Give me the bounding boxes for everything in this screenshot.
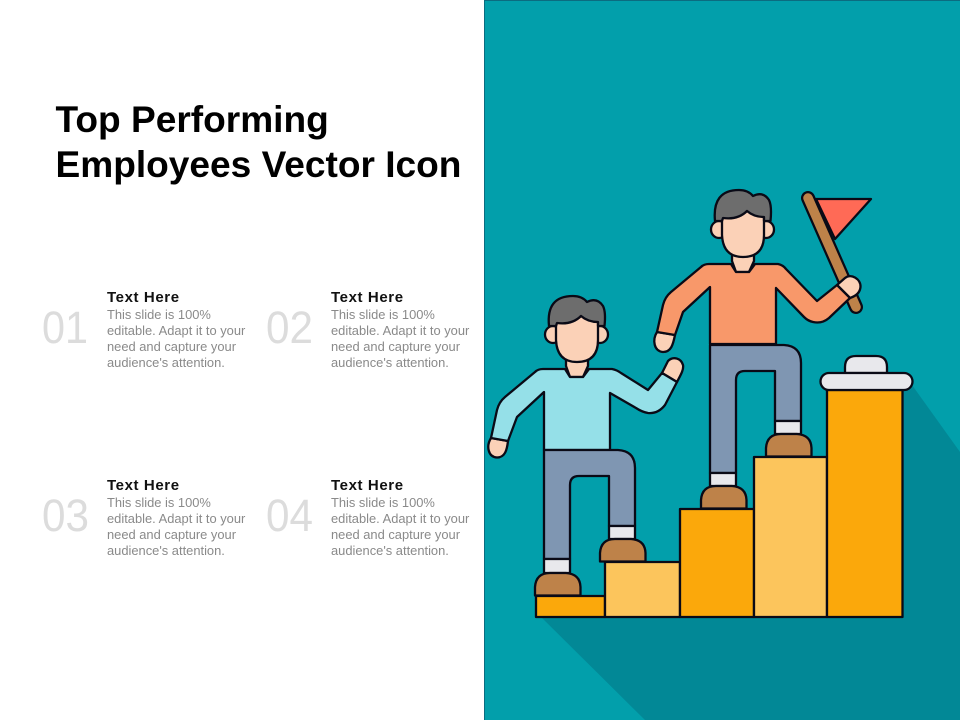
left employee hands	[488, 358, 683, 458]
text block 04: 04	[266, 490, 313, 541]
text block 02: This slide is 100%	[331, 307, 435, 322]
person: right employee with flag	[654, 190, 871, 508]
text block 02: editable. Adapt it to your	[331, 323, 470, 338]
text block 03	[42, 477, 246, 558]
left employee sweater	[491, 369, 677, 450]
text block 04: audience's attention.	[331, 543, 449, 558]
text block 02: audience's attention.	[331, 355, 449, 370]
text block 01: audience's attention.	[107, 355, 225, 370]
left employee socks	[544, 526, 635, 573]
text block 01: Text Here	[107, 289, 180, 306]
text block 03: editable. Adapt it to your	[107, 511, 246, 526]
text block 03: audience's attention.	[107, 543, 225, 558]
text block 01: editable. Adapt it to your	[107, 323, 246, 338]
right employee head	[711, 190, 774, 257]
text block 02: Text Here	[331, 289, 404, 306]
text block 01: 01	[42, 302, 88, 353]
title: Employees Vector Icon	[56, 143, 461, 185]
text block 01	[42, 289, 246, 370]
left employee shoes	[535, 539, 646, 596]
red flag	[816, 199, 871, 239]
flag pole	[808, 198, 856, 307]
long shadow	[536, 385, 960, 720]
right employee neck	[732, 255, 754, 272]
text block 02: 02	[266, 302, 313, 353]
text block 04: need and capture your	[331, 527, 461, 542]
left employee trousers	[544, 450, 635, 559]
text block 04: This slide is 100%	[331, 495, 435, 510]
right employee trousers	[710, 345, 801, 473]
text block 04: editable. Adapt it to your	[331, 511, 470, 526]
text block 03: 03	[42, 490, 89, 541]
panel: teal background	[484, 0, 960, 720]
right employee socks	[710, 421, 801, 486]
text block 04	[266, 477, 470, 558]
right employee hands	[654, 276, 861, 352]
person: left employee	[488, 296, 683, 596]
text block 04: Text Here	[331, 477, 404, 494]
icon: trophy cap on the top bar	[820, 356, 912, 390]
right employee shoes	[701, 434, 812, 508]
text block 02	[266, 289, 470, 370]
text block 03: Text Here	[107, 477, 180, 494]
bar chart: rising steps	[536, 390, 902, 617]
right employee sweater	[657, 264, 850, 344]
text block 02: need and capture your	[331, 339, 461, 354]
title	[56, 98, 461, 185]
text block 01: need and capture your	[107, 339, 237, 354]
text block 03: This slide is 100%	[107, 495, 211, 510]
left employee neck	[566, 360, 588, 377]
left employee head	[545, 296, 608, 362]
text block 01: This slide is 100%	[107, 307, 211, 322]
title: Top Performing	[56, 98, 329, 140]
text block 03: need and capture your	[107, 527, 237, 542]
